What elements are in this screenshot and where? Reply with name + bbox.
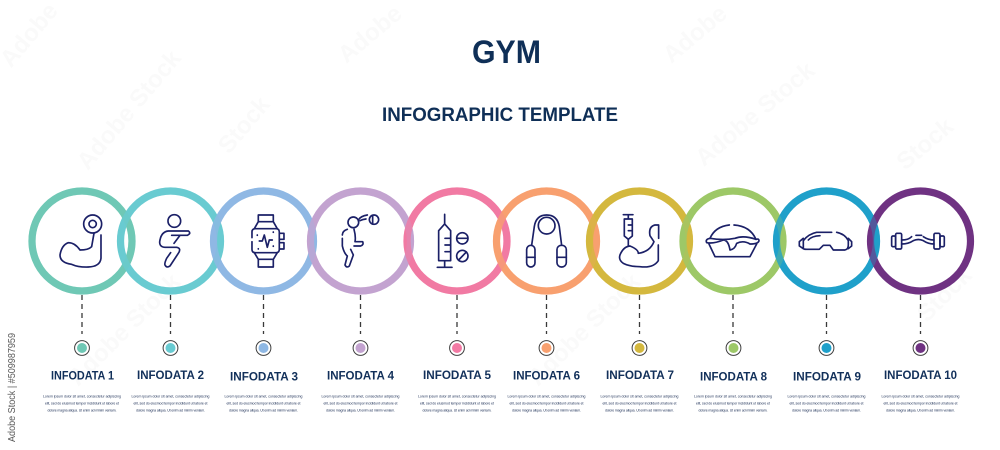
description 7: dolore magna aliqua. Ut enim ad minim veniam. [605, 408, 674, 412]
ring 4 [310, 191, 410, 291]
description 7: elit, sed do eiusmod tempor incididunt ut labore et [602, 402, 677, 406]
label 10: INFODATA 10 [884, 368, 957, 382]
ring 5 [407, 191, 507, 291]
marker 3 [256, 341, 271, 355]
column: infodata 1 [32, 191, 132, 412]
connector 8 [732, 295, 734, 334]
marker 1 [75, 341, 89, 355]
description 9 [788, 394, 866, 412]
text: Adobe Stock [63, 268, 187, 391]
column: infodata 3 [120, 191, 314, 412]
description 4: dolore magna aliqua. Ut enim ad minim veniam. [326, 408, 395, 412]
icon: flexed arm with weight plate [60, 215, 102, 267]
label 4: INFODATA 4 [327, 368, 394, 382]
description 9: elit, sed do eiusmod tempor incididunt ut labore et [790, 402, 864, 406]
icon: smartwatch [252, 215, 284, 267]
description 2 [132, 394, 210, 412]
description 9: dolore magna aliqua. Ut enim ad minim veniam. [792, 408, 861, 412]
connector 10 [920, 295, 922, 334]
description 6: elit, sed do eiusmod tempor incididunt ut labore et [510, 402, 584, 406]
ring 10 [870, 191, 970, 291]
description 8: Lorem ipsum dolor sit amet, consectetur adipiscing [694, 394, 772, 398]
column: infodata 6 [407, 191, 596, 412]
description 10 [882, 394, 960, 412]
title: GYM [472, 34, 541, 70]
icon: syringe and flexed arm [620, 215, 659, 267]
description 8 [694, 394, 772, 412]
ring 8 [683, 191, 783, 291]
description 5 [418, 394, 496, 412]
column: infodata 8 [590, 191, 783, 412]
description 10: elit, sed do eiusmod tempor incididunt ut labore et [884, 402, 958, 406]
icon: person heading a ball [342, 215, 379, 267]
description 5: dolore magna aliqua. Ut enim ad minim veniam. [422, 408, 492, 412]
text: Stock [912, 262, 978, 327]
description 8: dolore magna aliqua. Ut enim ad minim veniam. [698, 408, 768, 412]
subtitle: INFOGRAPHIC TEMPLATE [382, 104, 618, 126]
connector 4 [360, 295, 362, 334]
description 3: dolore magna aliqua. Ut enim ad minim veniam. [229, 408, 298, 412]
icon: swim goggles [799, 232, 852, 250]
description 10: dolore magna aliqua. Ut enim ad minim veniam. [886, 408, 955, 412]
icon: squat exercise [160, 215, 190, 267]
marker 8 [726, 341, 741, 355]
ring 9 [776, 191, 876, 291]
description 10: Lorem ipsum dolor sit amet, consectetur adipiscing [882, 394, 960, 398]
label 1: INFODATA 1 [51, 368, 114, 382]
marker 10 [913, 341, 928, 355]
connector 5 [456, 295, 458, 334]
column: infodata 4 [214, 191, 410, 412]
ring 1 [32, 191, 132, 291]
connector 7 [638, 295, 640, 334]
description 7 [600, 394, 679, 412]
description 2: elit, sed do eiusmod tempor incididunt ut labore et [134, 402, 208, 406]
ring 7 [590, 191, 690, 291]
description 5: elit, sed do eiusmod tempor incididunt ut labore et [420, 402, 494, 406]
label 9: INFODATA 9 [793, 370, 861, 384]
description 6: dolore magna aliqua. Ut enim ad minim veniam. [512, 408, 581, 412]
description 2: Lorem ipsum dolor sit amet, consectetur adipiscing [132, 394, 210, 398]
connector 9 [826, 295, 828, 334]
text: Adobe Stock [72, 45, 187, 175]
description 8: elit, sed do eiusmod tempor incididunt ut labore et [696, 402, 770, 406]
marker 9 [819, 341, 834, 355]
label 8: INFODATA 8 [700, 370, 767, 384]
marker 7 [632, 341, 647, 355]
description 5: Lorem ipsum dolor sit amet, consectetur adipiscing [418, 394, 496, 398]
column: infodata 9 [683, 191, 876, 412]
label 2: INFODATA 2 [137, 368, 204, 382]
text: Adobe Stock [690, 56, 821, 172]
icon: pie [706, 225, 759, 257]
description 1: elit, sed do eiusmod tempor incididunt ut labore et [45, 402, 119, 406]
connector 6 [546, 295, 548, 334]
ring 3 [214, 191, 314, 291]
text: Adobe [658, 0, 732, 69]
connector 3 [262, 295, 264, 334]
icon: hand grip [527, 215, 566, 267]
text: Stock [213, 91, 276, 159]
ring 2 [120, 191, 220, 291]
description 7: Lorem ipsum dolor sit amet, consectetur adipiscing [600, 394, 679, 398]
column: infodata 5 [310, 191, 507, 412]
text: Adobe [333, 0, 407, 69]
side credit text: Adobe Stock | #509987959 [6, 333, 18, 442]
label 5: INFODATA 5 [423, 368, 491, 382]
description 2: dolore magna aliqua. Ut enim ad minim veniam. [136, 408, 205, 412]
connector 2 [170, 295, 172, 334]
description 3 [224, 394, 303, 412]
column: infodata 7 [496, 191, 690, 412]
description 4: Lorem ipsum dolor sit amet, consectetur adipiscing [322, 394, 400, 398]
description 3: Lorem ipsum dolor sit amet, consectetur adipiscing [224, 394, 303, 398]
description 9: Lorem ipsum dolor sit amet, consectetur adipiscing [788, 394, 866, 398]
description 6: Lorem ipsum dolor sit amet, consectetur adipiscing [508, 394, 586, 398]
description 4: elit, sed do eiusmod tempor incididunt ut labore et [324, 402, 398, 406]
description 4 [322, 394, 400, 412]
ring 6 [496, 191, 596, 291]
label 7: INFODATA 7 [606, 368, 674, 382]
description 1: dolore magna aliqua. Ut enim ad minim veniam. [48, 408, 117, 412]
description 1: Lorem ipsum dolor sit amet, consectetur adipiscing [43, 394, 121, 398]
column: infodata 2 [32, 191, 220, 412]
label 3: INFODATA 3 [230, 370, 298, 384]
marker 2 [163, 341, 178, 355]
marker 6 [539, 341, 554, 355]
text: Adobe Stock [523, 268, 647, 391]
icon: syringe and pills [437, 214, 468, 267]
column: infodata 10 [776, 191, 970, 412]
label 6: INFODATA 6 [513, 368, 580, 382]
marker 5 [450, 341, 464, 355]
description 6 [508, 394, 586, 412]
description 1 [43, 394, 121, 412]
description 3: elit, sed do eiusmod tempor incididunt ut labore et [226, 402, 301, 406]
text: Stock [891, 112, 959, 176]
connector 1 [81, 295, 83, 334]
marker 4 [353, 341, 368, 355]
icon: curved barbell [892, 233, 944, 249]
